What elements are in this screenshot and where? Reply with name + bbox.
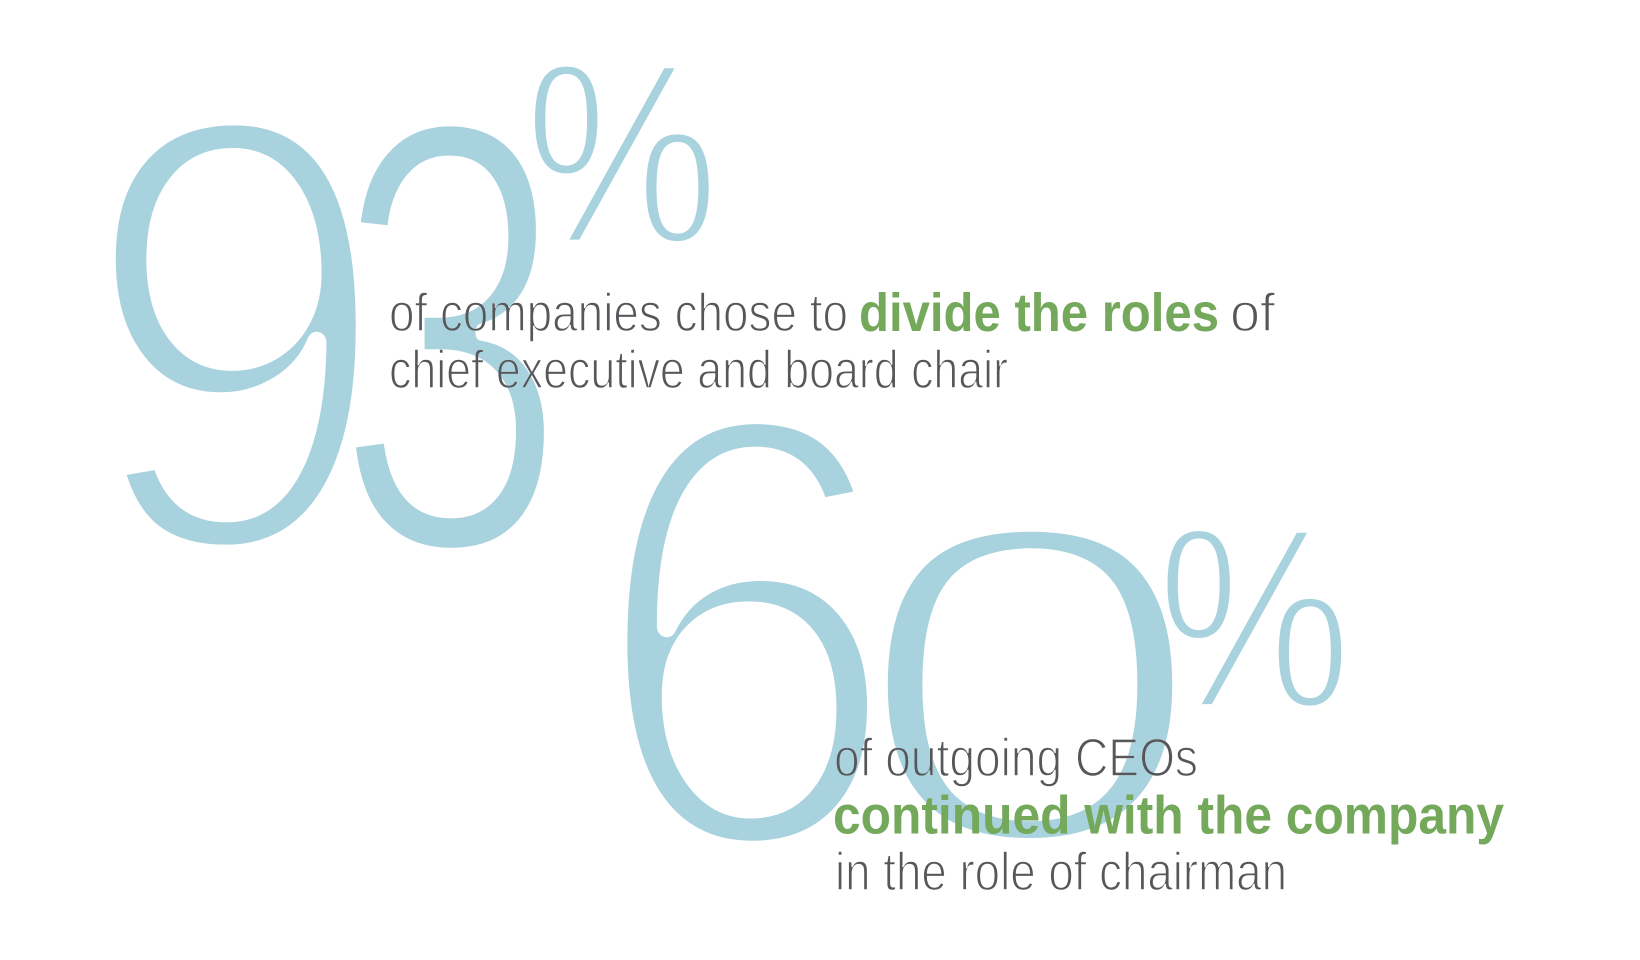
text block: divide the roles [389, 283, 1276, 400]
statistic: 60 percent: % [1157, 473, 1352, 762]
text block: divide the roles: divide the roles [859, 283, 1219, 343]
statistic: 60 percent: 0 [852, 429, 1209, 938]
text block: divide the roles: of companies chose to [389, 283, 848, 343]
text block: divide the roles: chief executive and board chair [389, 340, 1008, 400]
statistic: 93 percent: 9 [80, 0, 392, 682]
text block: continued with the company: continued with the company [833, 786, 1504, 846]
statistic: 60 percent [589, 286, 1352, 960]
text block: divide the roles: of [1230, 283, 1276, 343]
text block: continued with the company: in the role of chairman [835, 842, 1287, 902]
text block: continued with the company: of outgoing CEOs [834, 728, 1198, 788]
text block: continued with the company [833, 728, 1504, 902]
statistic: 93 percent: 3 [334, 0, 568, 680]
statistic: 60 percent: 6 [589, 286, 902, 960]
statistic: 93 percent: % [524, 9, 719, 298]
statistic: 93 percent [80, 0, 719, 682]
